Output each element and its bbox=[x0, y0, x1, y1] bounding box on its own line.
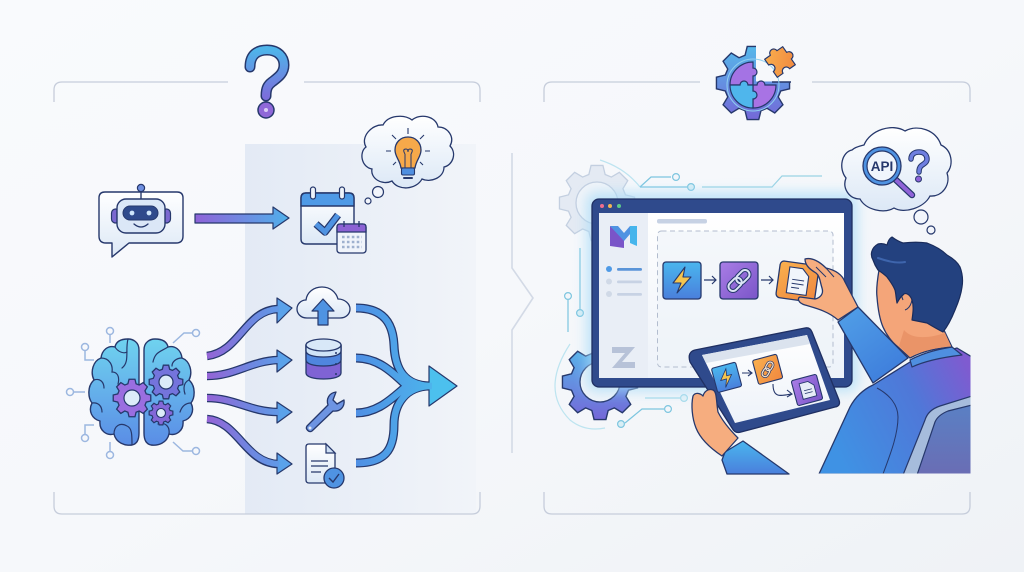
icon: database bbox=[306, 339, 341, 379]
background gear upper bbox=[559, 165, 635, 241]
shaded panel behind left workflow bbox=[245, 144, 476, 514]
tablet block: document bbox=[791, 374, 823, 406]
chair bbox=[903, 396, 972, 475]
icon: document with check bbox=[306, 444, 344, 488]
upper hand bbox=[798, 259, 858, 320]
orange file block bbox=[776, 261, 819, 303]
tablet bbox=[689, 328, 840, 432]
API label: API bbox=[871, 159, 893, 174]
collar bbox=[910, 347, 962, 367]
finger lines bbox=[816, 267, 834, 277]
gear lower blue bbox=[562, 344, 638, 420]
hair bbox=[871, 237, 963, 332]
left frame bbox=[54, 82, 480, 514]
dashed drop zone bbox=[658, 231, 833, 367]
icon: gear with puzzle bbox=[716, 40, 800, 120]
arrow bbox=[761, 276, 773, 284]
tablet block: bolt bbox=[711, 362, 742, 393]
gear: small purple bbox=[149, 401, 173, 425]
icon: question mark bbox=[250, 50, 284, 118]
icon: brain with gears bbox=[66, 328, 200, 458]
block: link bbox=[720, 262, 758, 299]
ear bbox=[902, 289, 912, 310]
lower sleeve bbox=[722, 441, 789, 474]
circuit traces bbox=[555, 160, 822, 429]
icon: robot speech bubble bbox=[99, 184, 183, 257]
thought cloud: API question bbox=[842, 128, 951, 234]
sidebar menu bbox=[606, 266, 642, 297]
arm reaching up bbox=[838, 307, 908, 383]
arrows: brain to tools bbox=[207, 298, 292, 474]
gear: large purple bbox=[113, 379, 151, 417]
question mark in cloud bbox=[911, 152, 927, 182]
thought cloud: light bulb idea bbox=[362, 116, 454, 204]
block: bolt bbox=[663, 262, 701, 299]
brain left hemisphere bbox=[89, 339, 139, 445]
torso bbox=[819, 348, 972, 474]
shoulder seam bbox=[877, 388, 898, 474]
lower hand bbox=[692, 389, 738, 456]
logo M bbox=[610, 226, 637, 248]
gear: upper blue bbox=[149, 365, 183, 399]
browser glow bbox=[586, 192, 858, 392]
logo Z bbox=[612, 347, 635, 368]
puzzle bottom-left piece bbox=[730, 81, 757, 108]
chevron divider bbox=[512, 153, 533, 453]
brain circuit nodes bbox=[66, 328, 200, 458]
icon: calendar with check bbox=[301, 187, 366, 253]
icon: cloud upload bbox=[297, 287, 350, 325]
right frame bbox=[544, 82, 970, 514]
brain right hemisphere bbox=[144, 339, 194, 445]
brain folds bbox=[92, 339, 191, 445]
orange puzzle piece bbox=[762, 41, 799, 77]
person bbox=[692, 237, 972, 475]
tablet block: link bbox=[752, 354, 783, 385]
merging arrow bbox=[356, 308, 457, 463]
tablet arrows bbox=[742, 370, 792, 397]
arrow: robot to calendar bbox=[195, 207, 289, 229]
puzzle top-left piece bbox=[730, 62, 757, 85]
icon: wrench bbox=[306, 392, 344, 432]
puzzle bottom-right piece bbox=[753, 81, 776, 108]
neck and face bbox=[877, 255, 952, 358]
chair and torso, clipped at frame edge bbox=[819, 347, 972, 475]
browser window bbox=[592, 199, 852, 387]
arrow bbox=[704, 276, 716, 284]
